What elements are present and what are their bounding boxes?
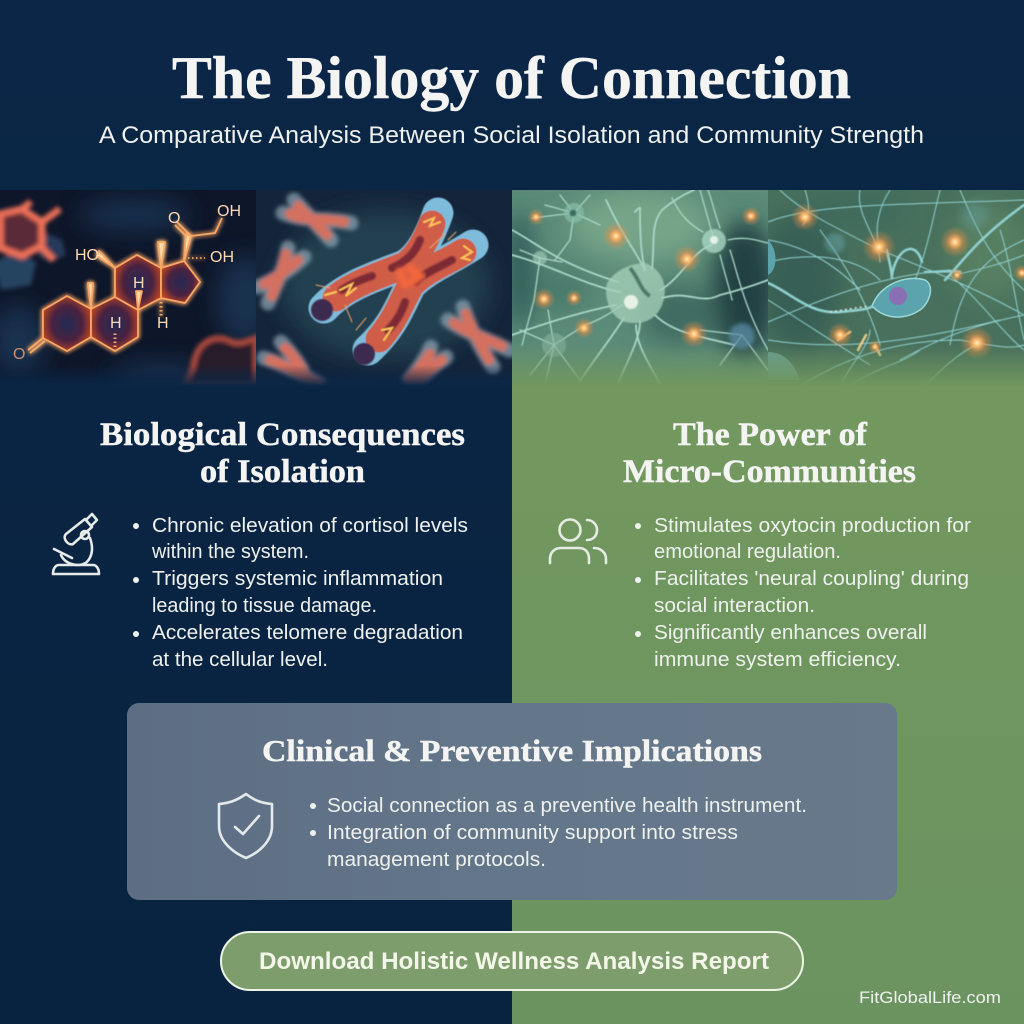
bullet list: clinical: management protocols.	[327, 849, 546, 871]
bullet list: isolation: Accelerates telomere degradation	[152, 622, 463, 644]
image: cortisol molecule: OH	[217, 203, 241, 220]
title: The Biology of Connection	[172, 45, 851, 111]
subtitle: A Comparative Analysis Between Social Isolation and Community Strength	[99, 122, 924, 149]
icon: microscope	[53, 514, 99, 574]
bullet list: micro-communities: Facilitates 'neural coupling' during	[654, 568, 969, 590]
bullet list: isolation	[133, 515, 468, 671]
heading: micro-communities: The Power of	[673, 417, 868, 453]
heading: micro-communities	[623, 417, 916, 490]
icon: people	[550, 520, 606, 563]
heading: clinical: Clinical & Preventive Implications	[262, 733, 762, 768]
bullet list: micro-communities: Stimulates oxytocin production for	[654, 515, 971, 537]
image fades	[0, 345, 1024, 386]
image: cortisol molecule: H	[110, 315, 122, 332]
icon: shield with check	[219, 794, 272, 858]
bullet list: micro-communities: Significantly enhances overall	[654, 622, 927, 644]
bullet list: micro-communities: emotional regulation.	[654, 541, 841, 563]
bullet list: clinical: Integration of community support into stress	[327, 822, 738, 844]
heading: isolation	[100, 417, 465, 490]
image: cortisol molecule: O	[168, 210, 180, 227]
heading: isolation: of Isolation	[200, 454, 365, 490]
image: cortisol molecule: HO	[75, 247, 99, 264]
panel: the power of micro-communities	[550, 417, 971, 671]
bullet list: micro-communities	[635, 515, 971, 671]
image: cortisol molecule: H	[133, 275, 145, 292]
heading: micro-communities: Micro-Communities	[623, 454, 916, 490]
bullet list: isolation: Chronic elevation of cortisol levels	[152, 515, 468, 537]
image: cortisol molecule: OH	[210, 249, 234, 266]
image: chromosomes	[256, 190, 512, 386]
heading: isolation: Biological Consequences	[100, 417, 465, 453]
bullet list: isolation: Triggers systemic inflammation	[152, 568, 443, 590]
bullet list: micro-communities: immune system efficiency.	[654, 649, 901, 671]
bullet list: clinical	[310, 795, 807, 871]
bullet list: micro-communities: social interaction.	[654, 595, 815, 617]
image: cortisol molecule	[0, 190, 273, 387]
image: neurons left	[506, 190, 777, 386]
watermark: site name: FitGlobalLife.com	[859, 988, 1001, 1007]
button: download report	[221, 932, 803, 990]
panel: biological consequences of isolation	[53, 417, 468, 671]
image: cortisol molecule: H	[157, 315, 169, 332]
button: download report: Download Holistic Wellness Analysis Report	[259, 948, 769, 975]
image: cortisol molecule: O	[13, 346, 25, 363]
image: neurons right	[760, 190, 1024, 386]
bullet list: clinical: Social connection as a preventive health instrument.	[327, 795, 807, 817]
panel: clinical and preventive implications	[127, 703, 897, 900]
bullet list: isolation: within the system.	[151, 541, 309, 563]
bullet list: isolation: at the cellular level.	[152, 649, 328, 671]
bullet list: isolation: leading to tissue damage.	[152, 595, 377, 617]
